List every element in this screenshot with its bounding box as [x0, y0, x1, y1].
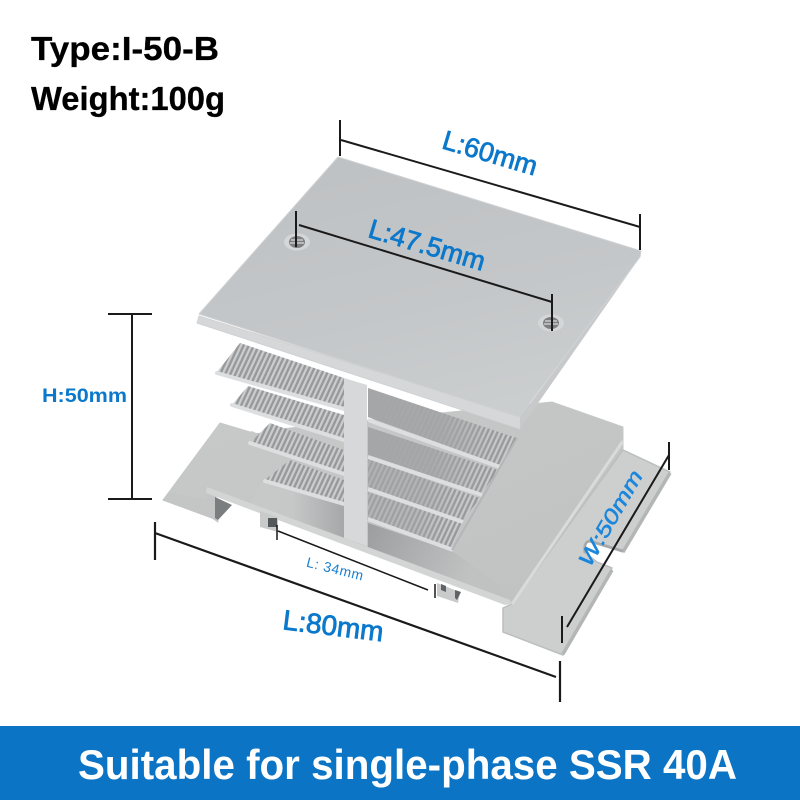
- dimension: height 50mm: H:50mm: [42, 386, 127, 407]
- right mounting flange with slot: [503, 441, 670, 655]
- heat sink product illustration: [163, 157, 670, 655]
- mounting hole left: [284, 234, 310, 250]
- lower body panel: [250, 482, 345, 538]
- weight label: Weight:100g: [31, 80, 225, 117]
- fin stripes: [217, 343, 344, 407]
- central web: [344, 378, 367, 546]
- top plate: [197, 157, 641, 429]
- dimension: slot spacing 34mm: [277, 525, 435, 598]
- front clips: [260, 511, 461, 603]
- type label: Type:I-50-B: [31, 30, 219, 67]
- fin channel 5: [368, 523, 508, 600]
- base plate: [163, 402, 623, 604]
- dimension: hole spacing 47.5mm: [296, 211, 552, 331]
- dimension: hole spacing 47.5mm: L:47.5mm: [365, 214, 489, 277]
- fin channel 3: [368, 459, 480, 520]
- fin channel 2: [368, 427, 498, 493]
- dimension: top plate length 60mm: [340, 120, 640, 250]
- title: type and weight: [31, 30, 225, 117]
- banner: compatibility note: Suitable for single-phase SSR 40A: [78, 741, 737, 788]
- dimension: base length 80mm: [155, 522, 560, 702]
- mounting hole right: [538, 314, 564, 332]
- dimension: base width 50mm: W:50mm: [574, 466, 648, 570]
- front edge of base: [206, 487, 511, 605]
- right fins: [368, 388, 517, 600]
- dimension: base width 50mm: [562, 442, 669, 643]
- fin edges: [368, 420, 500, 467]
- dimension: base length 80mm: L:80mm: [281, 604, 385, 647]
- fin edges: [217, 373, 344, 409]
- dimension: height 50mm: [42, 314, 152, 499]
- dimension: top plate length 60mm: L:60mm: [439, 125, 541, 181]
- fin channel 1: [368, 388, 517, 465]
- dimension: slot spacing 34mm: L: 34mm: [305, 554, 366, 584]
- banner: compatibility note: [0, 726, 800, 800]
- fin channel 4: [368, 492, 462, 548]
- left fins: [217, 343, 345, 538]
